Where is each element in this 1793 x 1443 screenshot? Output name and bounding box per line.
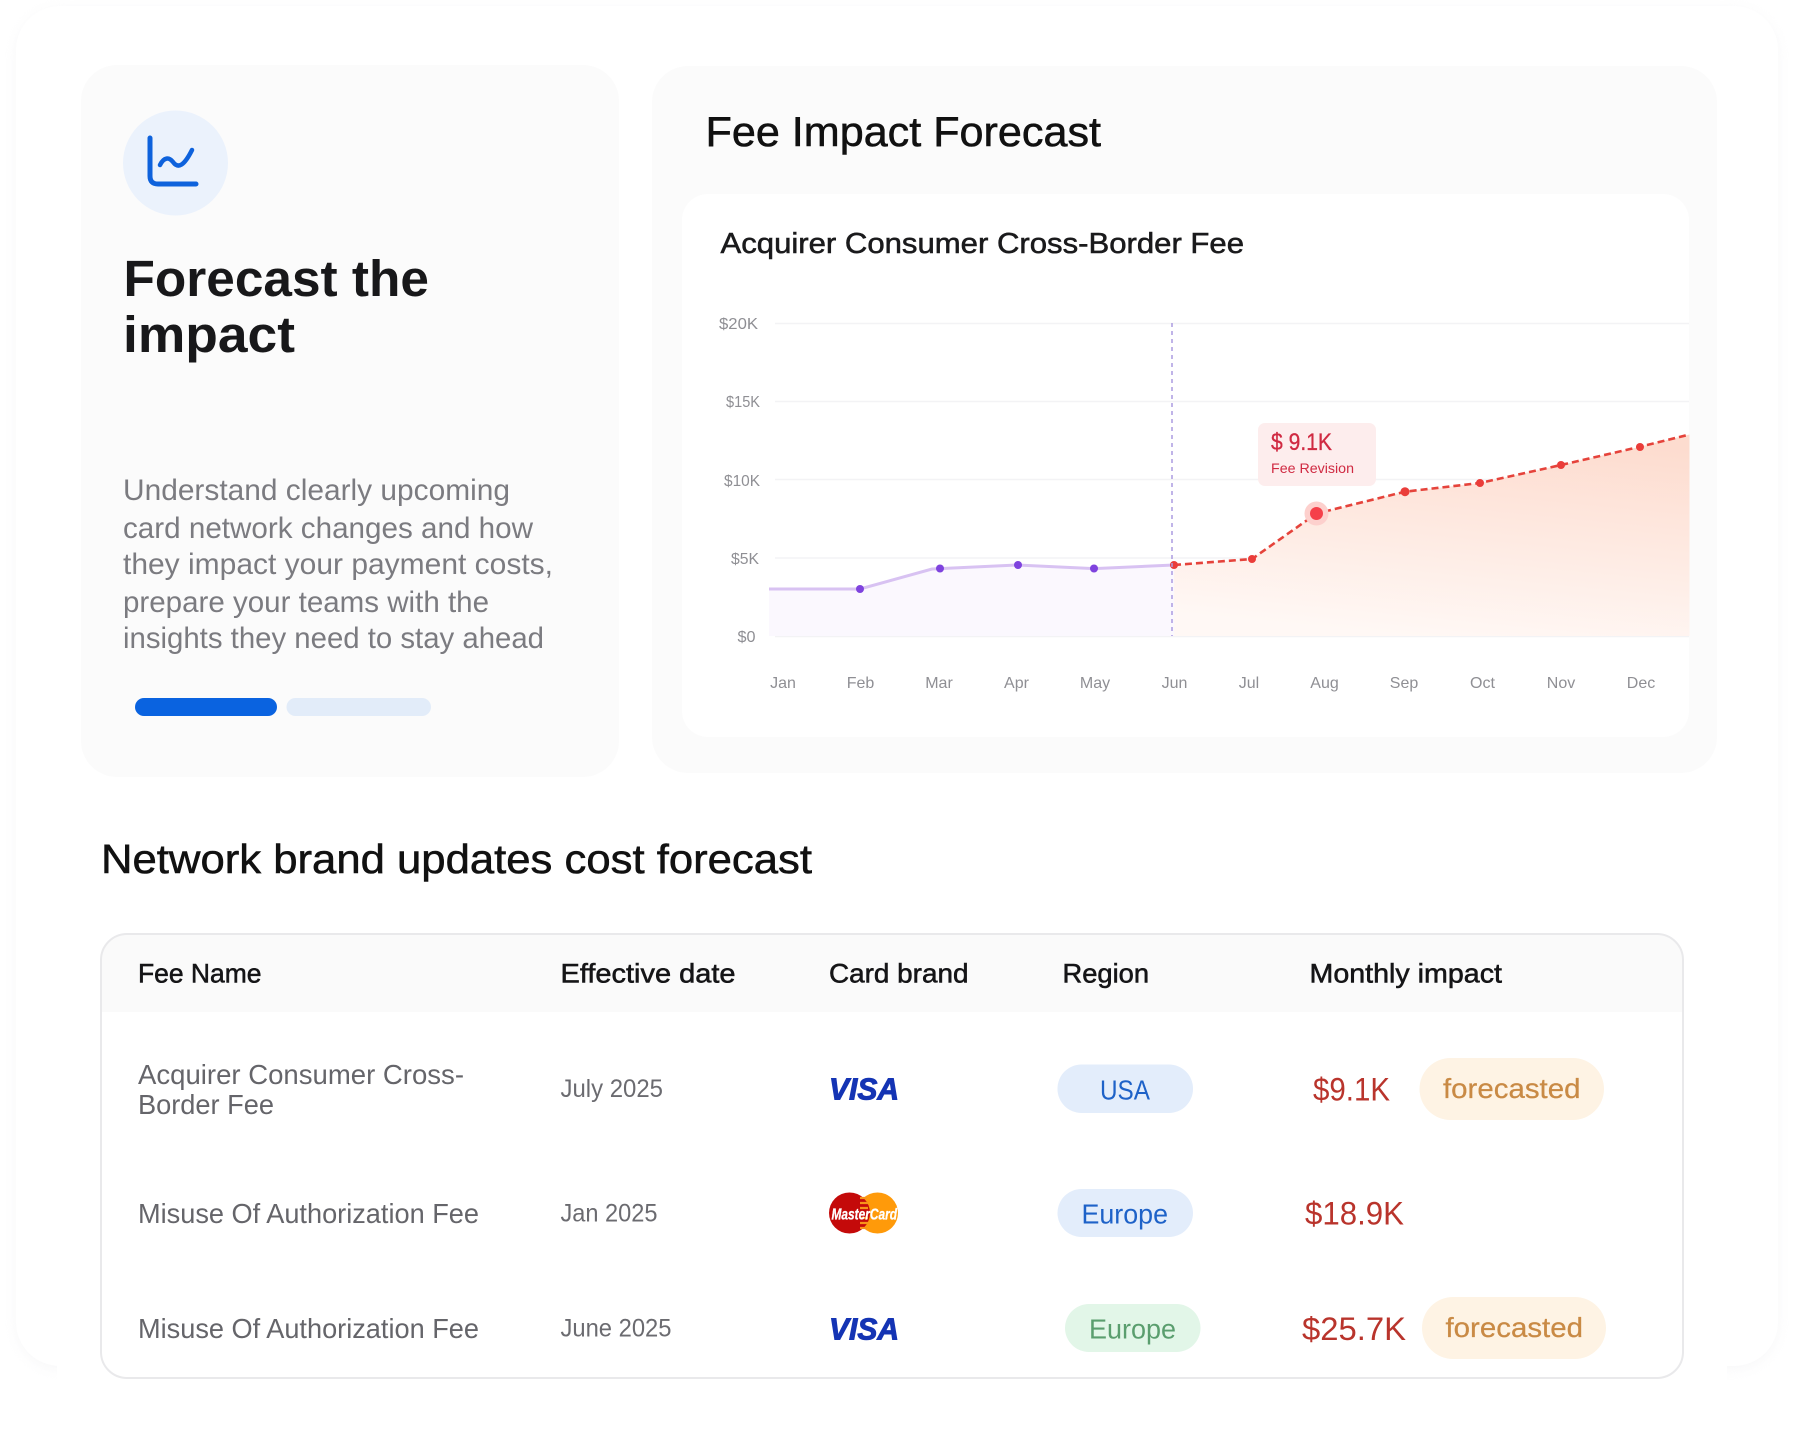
icon: mastercard: MasterCard [832, 1206, 898, 1224]
badge: europe [1058, 1189, 1193, 1237]
callout: fee revision [1258, 423, 1376, 486]
table header: Fee Name [138, 958, 262, 988]
heading: forecast the impact [123, 250, 429, 363]
badge: usa: USA [1100, 1074, 1151, 1106]
row 2 [138, 1189, 1404, 1237]
chart title: Acquirer Consumer Cross-Border Fee [720, 228, 1244, 260]
x axis labels [770, 675, 1655, 692]
badge: europe green [1065, 1304, 1200, 1352]
x axis labels: Feb [847, 675, 874, 692]
x axis labels: Nov [1547, 675, 1575, 692]
row 3 [138, 1297, 1606, 1359]
badge: forecasted [1420, 1058, 1604, 1120]
divider: june marker [1171, 323, 1173, 636]
row 3: June 2025 [560, 1314, 672, 1342]
intro text: they impact your payment costs, [123, 548, 553, 581]
amount: $18.9K [1305, 1196, 1404, 1232]
intro text: card network changes and how [123, 512, 533, 545]
forecast area and line [1170, 434, 1690, 636]
badge: europe: Europe [1082, 1198, 1168, 1230]
intro text: insights they need to stay ahead [123, 622, 544, 655]
row 3: Misuse Of Authorization Fee [138, 1313, 479, 1344]
table header: Region [1062, 958, 1149, 988]
callout: fee revision: Fee Revision [1271, 460, 1354, 476]
x axis labels: May [1080, 675, 1110, 692]
table header [138, 958, 1503, 988]
y axis labels [719, 316, 760, 646]
badge: forecasted [1422, 1297, 1606, 1359]
amount: $25.7K [1302, 1311, 1406, 1347]
heading: network brand updates: Network brand updates cost forecast [101, 836, 813, 882]
badge: usa [1058, 1064, 1193, 1113]
intro text [123, 474, 553, 655]
x axis labels: Jan [770, 675, 796, 692]
icon: line chart [123, 110, 228, 216]
y axis labels: $5K [731, 551, 759, 568]
intro text: prepare your teams with the [123, 586, 489, 619]
x axis labels: Apr [1004, 675, 1030, 692]
x axis labels: Oct [1470, 675, 1496, 692]
y axis labels: $20K [719, 316, 758, 333]
x axis labels: Mar [925, 675, 953, 692]
row 1: Border Fee [138, 1089, 274, 1120]
chart card [682, 194, 1690, 737]
badge: forecasted: forecasted [1443, 1073, 1580, 1104]
badge: forecasted: forecasted [1446, 1312, 1583, 1343]
amount: $9.1K [1313, 1072, 1390, 1108]
table header: Card brand [829, 958, 968, 988]
x axis labels: Jul [1239, 675, 1259, 692]
table [101, 934, 1683, 1378]
intro text: Understand clearly upcoming [123, 474, 510, 507]
x axis labels: Sep [1390, 675, 1418, 692]
row 2: Misuse Of Authorization Fee [138, 1198, 479, 1229]
row 1: Acquirer Consumer Cross- [138, 1059, 464, 1090]
y axis labels: $0 [738, 629, 756, 646]
icon: visa: VISA [829, 1072, 899, 1106]
x axis labels: Dec [1627, 675, 1655, 692]
row 2: Jan 2025 [560, 1200, 658, 1228]
panel: fee impact forecast [652, 66, 1717, 773]
row 1 [138, 1058, 1604, 1120]
y axis labels: $15K [726, 394, 760, 411]
heading: fee impact forecast: Fee Impact Forecast [706, 108, 1101, 155]
panel: forecast intro [81, 65, 619, 777]
progress indicator [135, 698, 431, 716]
table header: Effective date [560, 958, 736, 988]
x axis labels: Aug [1310, 675, 1339, 692]
x axis labels: Jun [1162, 675, 1187, 692]
y axis labels: $10K [724, 473, 760, 490]
row 1: July 2025 [560, 1075, 663, 1103]
heading: forecast the impact: Forecast the [124, 250, 429, 307]
icon: mastercard [829, 1192, 898, 1234]
table header: Monthly impact [1310, 958, 1503, 988]
badge: europe green: Europe [1089, 1314, 1176, 1344]
callout: fee revision: $ 9.1K [1271, 429, 1332, 456]
heading: forecast the impact: impact [123, 306, 295, 363]
icon: visa: VISA [829, 1312, 899, 1346]
actual area and line [769, 561, 1174, 636]
